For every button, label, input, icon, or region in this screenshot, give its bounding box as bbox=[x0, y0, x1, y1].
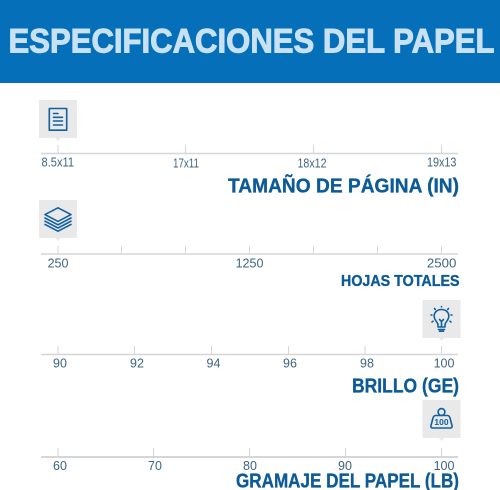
total sheets labels bbox=[48, 256, 456, 270]
brightness labels: 98 bbox=[360, 356, 374, 370]
total sheets labels: 2500 bbox=[427, 256, 456, 270]
page size labels: 19x13 bbox=[427, 156, 456, 170]
paper weight labels: 60 bbox=[53, 459, 67, 473]
paper weight labels: 100 bbox=[434, 459, 454, 473]
brightness labels: 90 bbox=[53, 356, 67, 370]
brightness labels: 94 bbox=[207, 356, 220, 370]
icon: document bbox=[39, 100, 77, 141]
scale: paper weight bbox=[41, 400, 460, 490]
scale: total sheets bbox=[39, 200, 460, 290]
paper weight labels: 70 bbox=[148, 459, 162, 473]
paper weight labels bbox=[53, 459, 454, 473]
icon: weight bbox=[422, 400, 460, 441]
paper weight labels: 90 bbox=[338, 459, 352, 473]
icon: paper stack bbox=[39, 200, 77, 241]
page size labels: 17x11 bbox=[173, 156, 199, 170]
brightness labels bbox=[53, 356, 454, 370]
total sheets labels: 250 bbox=[48, 256, 68, 270]
icon: light bulb bbox=[422, 300, 460, 341]
scale: page size bbox=[39, 100, 459, 198]
page size labels: 8.5x11 bbox=[42, 156, 74, 170]
heading: brightness: BRILLO (GE) bbox=[352, 375, 459, 397]
brightness labels: 96 bbox=[283, 356, 297, 370]
brightness labels: 92 bbox=[130, 356, 144, 370]
total sheets labels: 1250 bbox=[236, 256, 263, 270]
page size labels: 18x12 bbox=[298, 156, 327, 170]
brightness labels: 100 bbox=[434, 356, 454, 370]
header banner bbox=[0, 0, 500, 83]
heading: page size: TAMAÑO DE PÁGINA (IN) bbox=[228, 174, 459, 198]
paper weight labels: 80 bbox=[243, 459, 257, 473]
page size labels bbox=[42, 156, 456, 170]
heading: total sheets: HOJAS TOTALES bbox=[341, 273, 460, 290]
scale: brightness bbox=[41, 300, 460, 397]
icon: weight: 100 bbox=[434, 417, 449, 427]
